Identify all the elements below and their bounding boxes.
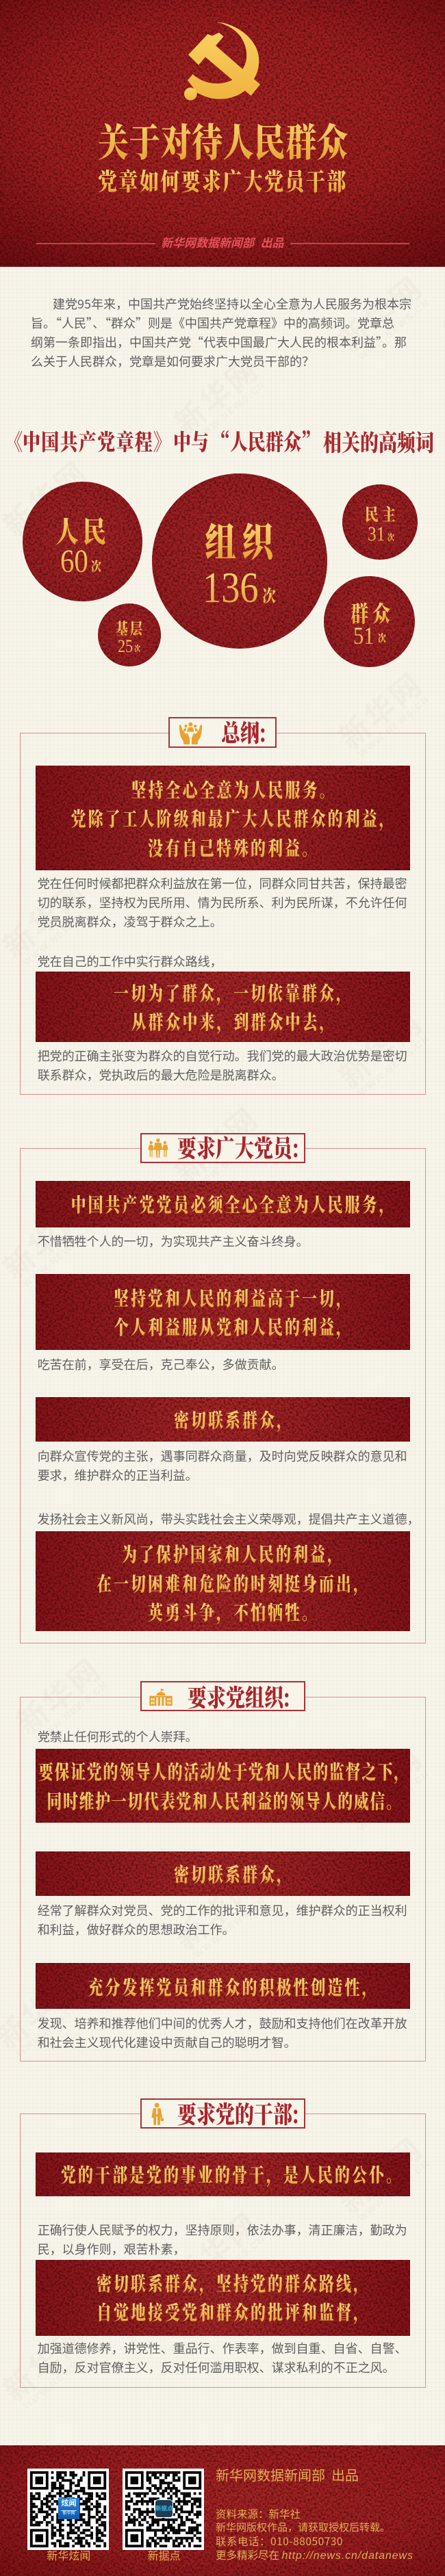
text block: 党禁止: 党禁止任何形式的个人崇拜。 (38, 1728, 198, 1745)
icon: 新据点 app logo: 新据点 (155, 2505, 173, 2512)
section heading: 要求党组织: 要求党组织: (188, 1680, 290, 1714)
icon: person with tie (151, 2103, 164, 2125)
footer info: 资料来源：新华社 (216, 2506, 301, 2521)
section heading: 要求广大党员 (140, 1133, 305, 1163)
text block: 发现培养 (38, 2014, 407, 2051)
bubble: 人民 60 (23, 482, 142, 601)
banner: 密切联系群众: 密切联系群众， (174, 1407, 294, 1433)
text: 新华网 (163, 1861, 267, 1958)
banner: 党的干部 (36, 2152, 410, 2196)
banner: 坚持全心全意: 坚持全心全意为人民服务。 (131, 776, 337, 803)
text block: 把党的正确主张 (38, 1047, 407, 1084)
banner: 坚持党和人民的利益 (36, 1274, 410, 1350)
section heading: 总纲 (168, 717, 277, 748)
text block: 经常了解 (38, 1901, 407, 1938)
text: WWW.NEWS.CN (192, 1894, 268, 1960)
text block: 加强道德修养 (38, 2339, 407, 2376)
section heading: 要求党的干部 (140, 2098, 305, 2128)
text block: introduction: 纲第一条即指出，中国共产党“代表中国最广大人民的根本利益”。那 (31, 333, 407, 351)
banner: 一切为了群众: 从群众中来，到群众中去， (131, 1009, 337, 1035)
panel: party members (20, 1148, 426, 1643)
footer info (216, 2506, 414, 2562)
banner: 要保证党的领导人: 要保证党的领导人的活动处于党和人民的监督之下， (38, 1758, 410, 1785)
text block: introduction (31, 295, 411, 370)
bubble: 基层 25: 25 (118, 636, 133, 656)
text block: 发现培养: 发现、培养和推荐他们中间的优秀人才，鼓励和支持他们在改革开放 (38, 2014, 407, 2032)
bubble: 组织 136: 组织 (205, 512, 279, 568)
bubble: 基层 25: 次 (134, 642, 140, 654)
text: WWW.NEWS.CN (21, 902, 97, 968)
bubble: 群众 51: 51 (353, 622, 374, 649)
bubble: 民主 31: 民主 (365, 501, 399, 525)
text: 新华网 (163, 2200, 267, 2297)
text block: introduction: 旨。“人民”、“群众”则是《中国共产党章程》中的高频词。党章总 (31, 314, 394, 332)
icon: party emblem (184, 22, 260, 101)
text block: 向群众宣传 (38, 1447, 407, 1484)
text block: introduction: 建党95年来，中国共产党始终坚持以全心全意为人民服务为根本宗 (53, 295, 411, 313)
text: WWW.NEWS.CN (21, 1223, 97, 1290)
section heading: 要求党组织 (140, 1681, 305, 1711)
bubble: 人民 60: 60 (60, 543, 88, 580)
banner: 密切联系群众 cadres: 自觉地接受党和群众的批评和监督， (97, 2299, 370, 2326)
text: 新华网 (327, 1734, 431, 1832)
QR label: 新据点: 新据点 (148, 2547, 181, 2563)
section heading: 要求党的干部: 要求党的干部: (177, 2096, 299, 2131)
heading: high frequency words: 中国共产党章程 (23, 425, 153, 457)
subtitle: 党章如何要求广大党员干部 (98, 164, 348, 198)
text block: 向群众宣传: 向群众宣传党的主张，遇事同群众商量，及时向党反映群众的意见和 (38, 1447, 407, 1465)
text: 新华网 (327, 2124, 431, 2222)
text block: introduction: 么关于人民群众，党章是如何要求广大党员干部的？ (31, 352, 314, 370)
text block: 党在任何时候: 党在任何时候都把群众利益放在第一位，同群众同甘共苦，保持最密 (38, 874, 407, 892)
text: WWW.NEWS.CN (356, 296, 432, 363)
title: 关于对待人民群众 (98, 112, 348, 167)
text block: 把党的正确主张: 把党的正确主张变为群众的自觉行动。我们党的最大政治优势是密切 (38, 1047, 407, 1065)
text block: 党在任何时候: 切的联系，坚持权为民所用、情为民所系、利为民所谋，不允许任何 (38, 894, 407, 911)
text: 新华网 (327, 660, 431, 757)
text block: 党在任何时候: 党员脱离群众，凌驾于群众之上。 (38, 913, 222, 931)
text block: 正确行使 (38, 2221, 407, 2258)
bubble: 群众 51 (324, 576, 415, 667)
banner: 密切联系群众 organization: 密切联系群众， (174, 1861, 294, 1888)
bubble: 人民 60: 次 (91, 557, 101, 575)
banner: 为了保护国家: 为了保护国家和人民的利益， (122, 1541, 344, 1567)
bubble: 民主 31: 次 (387, 530, 394, 543)
heading: high frequency words: 中与 (173, 425, 209, 457)
footer info: 更多精彩尽在 http://news.cn/datanews (216, 2547, 414, 2562)
banner: 一切为了群众: 一切为了群众，一切依靠群众， (114, 979, 353, 1006)
text block: 不惜牺牲: 不惜牺牲个人的一切，为实现共产主义奋斗终身。 (38, 1232, 309, 1250)
banner: 中国共产党党员: 中国共产党党员必须全心全意为人民服务， (71, 1191, 396, 1218)
banner: 党的干部: 党的干部是党的事业的骨干，是人民的公仆。 (61, 2161, 403, 2188)
icon: hands holding people (179, 723, 203, 744)
QR code: 新华炫闻 (27, 2469, 109, 2550)
text: WWW.NEWS.CN (356, 2157, 432, 2224)
bubble: 群众 51: 群众 (351, 597, 394, 628)
banner: 密切联系群众 organization (36, 1851, 410, 1896)
banner: 坚持全心全意: 党除了工人阶级和最广大人民群众的利益， (71, 805, 396, 832)
byline: 新华网数据新闻部 出品 (161, 237, 283, 250)
text: 新华网 (327, 263, 431, 361)
panel: general program (20, 733, 426, 1095)
text block: 加强道德修养: 自励，反对官僚主义，反对任何滥用职权、谋求私利的不正之风。 (38, 2358, 395, 2376)
heading: high frequency words: 》 (153, 425, 171, 457)
section heading: 总纲: 总纲: (221, 715, 266, 749)
heading: high frequency words: 《 (5, 425, 23, 457)
text: WWW.NEWS.CN (356, 1767, 432, 1834)
text: 新华网 (327, 999, 431, 1096)
bubble: 民主 31: 31 (368, 523, 385, 545)
QR label: 新华炫闻: 新华炫闻 (47, 2547, 90, 2563)
banner: 充分发挥 (36, 1963, 410, 2009)
section heading: 要求广大党员: 要求广大党员: (177, 1130, 299, 1165)
banner: 要保证党的领导人 (36, 1749, 410, 1823)
text block: 经常了解: 和利益，做好群众的思想政治工作。 (38, 1921, 235, 1938)
bubble: 组织 136: 136 (203, 563, 259, 612)
bubble: 民主 31 (342, 484, 418, 560)
icon: 新据点 app logo (155, 2499, 173, 2518)
text block: 正确行使: 民，以身作则，艰苦朴素， (38, 2240, 186, 2258)
icon: 炫闻 app logo: 新华网 (62, 2512, 75, 2516)
QR code: 新据点 (123, 2469, 204, 2550)
text block: 发现培养: 和社会主义现代化建设中贡献自己的聪明才智。 (38, 2033, 296, 2051)
icon: building (149, 1689, 173, 1706)
heading: high frequency words (5, 424, 434, 458)
panel: party cadres (20, 2113, 426, 2388)
text: 新华网 (163, 1095, 267, 1192)
icon: three people (148, 1139, 168, 1158)
heading: high frequency words: 相关的高频词 (323, 424, 434, 458)
text: 新华网 (5, 1645, 110, 1743)
bubble: 组织 136 (152, 473, 327, 649)
text block: 加强道德修养: 加强道德修养，讲党性、重品行、作表率，做到自重、自省、自警、 (38, 2339, 407, 2357)
heading: high frequency words: “人民群众” (212, 425, 319, 457)
panel: header banner (0, 0, 445, 267)
banner: 为了保护国家: 在一切困难和危险的时刻挺身而出， (97, 1570, 370, 1597)
footer credit: 新华网数据新闻部 出品 (216, 2464, 359, 2484)
footer info: 联系电话：010-88050730 (216, 2534, 343, 2549)
banner: 坚持全心全意: 没有自己特殊的利益。 (148, 834, 319, 861)
footer info: 新华网版权作品，请获取授权后转载。 (216, 2520, 390, 2534)
text: WWW.NEWS.CN (14, 1993, 90, 2059)
text: WWW.NEWS.CN (21, 2345, 97, 2412)
banner: 为了保护国家 (36, 1531, 410, 1631)
text: WWW.NEWS.CN (356, 1032, 432, 1098)
chart: word frequency bubbles (23, 473, 418, 667)
banner: 密切联系群众 cadres (36, 2260, 410, 2336)
icon: 炫闻 app logo: 炫闻 (62, 2499, 77, 2508)
text: WWW.NEWS.CN (34, 1678, 110, 1745)
text block: 经常了解: 经常了解群众对党员、党的工作的批评和意见，维护群众的正当权利 (38, 1901, 407, 1919)
bubble: 基层 25 (98, 603, 161, 666)
text block: 发扬社会主义新风尚: 发扬社会主义新风尚，带头实践社会主义荣辱观，提倡共产主义道德， (38, 1510, 420, 1528)
banner: 要保证党的领导人: 同时维护一切代表党和人民利益的领导人的威信。 (47, 1788, 403, 1814)
panel: party organizations (20, 1697, 426, 2061)
text: WWW.NEWS.CN (192, 1128, 268, 1194)
text: WWW.NEWS.CN (192, 2233, 268, 2299)
text block: 正确行使: 正确行使人民赋予的权力，坚持原则，依法办事，清正廉洁，勤政为 (38, 2221, 407, 2239)
banner: 密切联系群众 cadres: 密切联系群众，坚持党的群众路线， (97, 2270, 370, 2297)
text: WWW.NEWS.CN (356, 693, 432, 759)
text block: 党在任何时候 (38, 874, 407, 931)
banner: 为了保护国家: 英勇斗争，不怕牺牲。 (148, 1599, 319, 1626)
panel: footer (0, 2445, 445, 2576)
bubble: 基层 25: 基层 (116, 617, 144, 639)
bubble: 组织 136: 次 (262, 582, 276, 608)
text: 新华网 (163, 346, 267, 443)
banner: 坚持全心全意 (36, 766, 410, 870)
bubble: 人民 60: 人民 (55, 509, 110, 551)
banner: 密切联系群众 (36, 1397, 410, 1442)
icon: 炫闻 app logo (58, 2498, 79, 2519)
text: WWW.NEWS.CN (21, 481, 97, 547)
text block: 把党的正确主张: 联系群众，党执政后的最大危险是脱离群众。 (38, 1066, 284, 1084)
bubble: 群众 51: 次 (378, 631, 386, 645)
text block: 群众路线: 党在自己的工作中实行群众路线， (38, 952, 222, 970)
text block: 向群众宣传: 要求，维护群众的正当利益。 (38, 1466, 198, 1484)
banner: 坚持党和人民的利益: 坚持党和人民的利益高于一切， (114, 1284, 353, 1312)
banner: 坚持党和人民的利益: 个人利益服从党和人民的利益， (114, 1314, 353, 1340)
banner: 一切为了群众 (36, 972, 410, 1042)
banner: 中国共产党党员 (36, 1181, 410, 1227)
banner: 充分发挥: 充分发挥党员和群众的积极性创造性， (88, 1973, 379, 2001)
text block: 吃苦在前: 吃苦在前，享受在后，克己奉公，多做贡献。 (38, 1355, 284, 1373)
text: WWW.NEWS.CN (192, 378, 268, 445)
